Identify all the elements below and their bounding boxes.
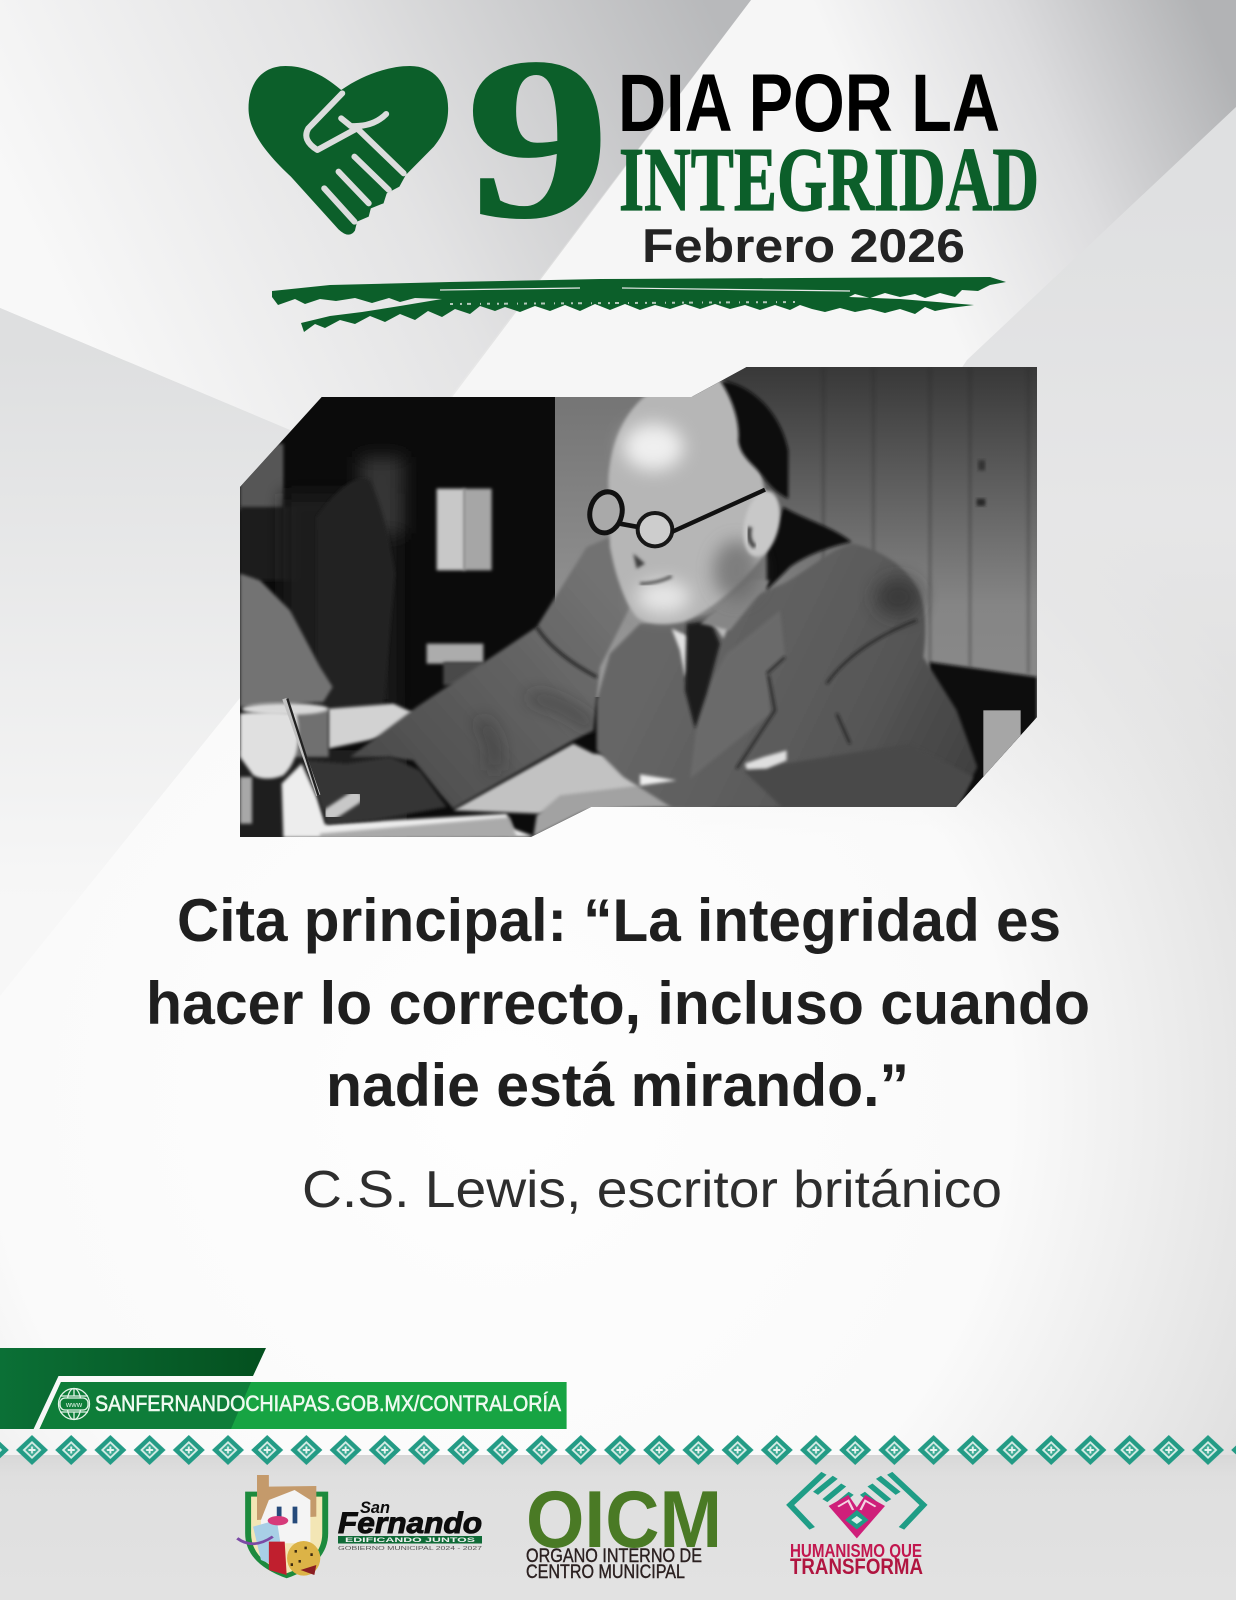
icon: globe [58, 1388, 90, 1420]
logo: OICM: OICM [526, 1475, 722, 1565]
photo: open book and writing hand [284, 699, 713, 837]
photo: jacket [597, 507, 977, 809]
quote text: hacer lo correcto, incluso cuando [146, 970, 1090, 1037]
brush underline [272, 277, 1006, 332]
title: dia por la: DIA POR LA [618, 58, 1000, 149]
photo: C.S. Lewis writing at a desk [240, 367, 1040, 840]
logo: San Fernando shield [237, 1475, 328, 1578]
date: febrero 2026: Febrero 2026 [642, 219, 965, 272]
logo: Humanismo que Transforma [790, 1473, 923, 1579]
logo: San Fernando wordmark: Fernando [338, 1507, 482, 1540]
quote text [146, 887, 1090, 1119]
logo: OICM: ORGANO INTERNO DE [526, 1546, 702, 1567]
icon: globe: www [65, 1400, 83, 1409]
photo background: room [240, 367, 1040, 837]
icon: heart with brackets [790, 1473, 923, 1538]
logo: San Fernando wordmark [338, 1498, 482, 1552]
logo: San Fernando wordmark: San [360, 1498, 390, 1517]
website banner [0, 1348, 567, 1429]
logo: Humanismo que Transforma: TRANSFORMA [790, 1554, 923, 1579]
photo: shirt and tie [672, 615, 733, 729]
attribution: C.S. Lewis, escritor británico [302, 1161, 1002, 1219]
photo: head and glasses [586, 379, 788, 630]
title: integridad: INTEGRIDAD [619, 129, 1039, 230]
icon: heart with handshake [249, 66, 448, 235]
numeral 9: 9 [466, 11, 610, 266]
photo: desk items [240, 703, 535, 840]
logo: OICM: CENTRO MUNICIPAL [526, 1562, 685, 1583]
website banner: SANFERNANDOCHIAPAS.GOB.MX/CONTRALORÍA [95, 1391, 561, 1416]
footer band [0, 1455, 1236, 1600]
quote text: Cita principal: “La integridad es [177, 887, 1061, 954]
logo: San Fernando wordmark: EDIFICANDO JUNTOS [345, 1537, 476, 1544]
logo: Humanismo que Transforma: HUMANISMO QUE [790, 1541, 922, 1561]
logo: San Fernando wordmark: GOBIERNO MUNICIPAL 2024 - 2027 [338, 1546, 482, 1552]
photo: sleeve [350, 537, 630, 809]
quote text: nadie está mirando.” [326, 1052, 909, 1119]
decorative diamond row [0, 1434, 1236, 1466]
